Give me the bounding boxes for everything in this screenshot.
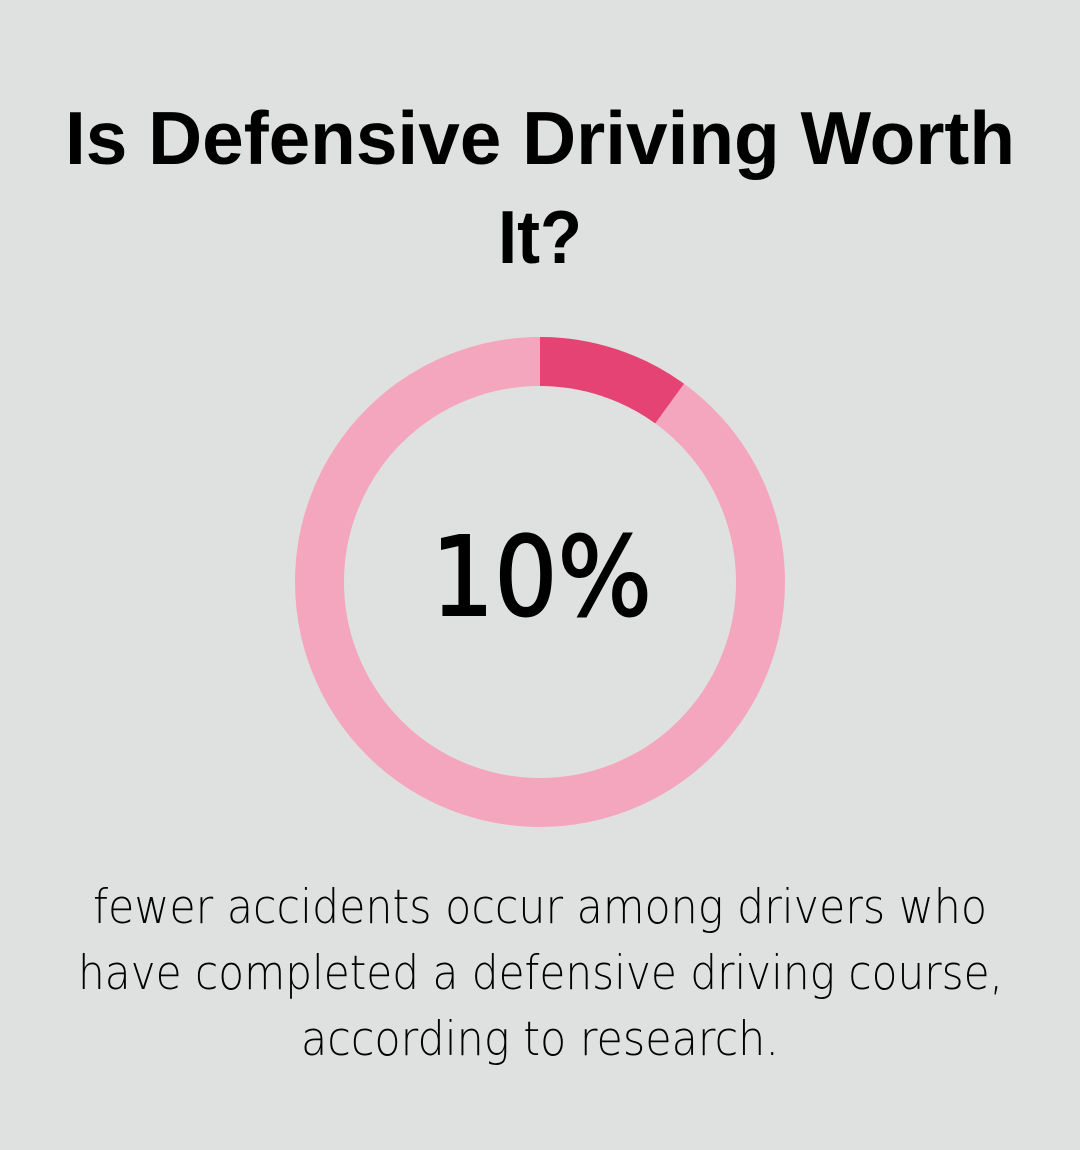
description text: fewer accidents occur among drivers who (93, 880, 987, 935)
description text (78, 880, 1003, 1067)
description text: according to research. (301, 1012, 779, 1067)
donut track (320, 362, 760, 802)
big number: 10% (431, 513, 652, 641)
donut highlighted segment (540, 362, 670, 404)
title: Is Defensive Driving Worth (65, 96, 1015, 180)
title (65, 96, 1015, 279)
title: It? (498, 195, 582, 279)
description text: have completed a defensive driving course, (78, 946, 1003, 1001)
donut chart: 10% (320, 362, 760, 802)
